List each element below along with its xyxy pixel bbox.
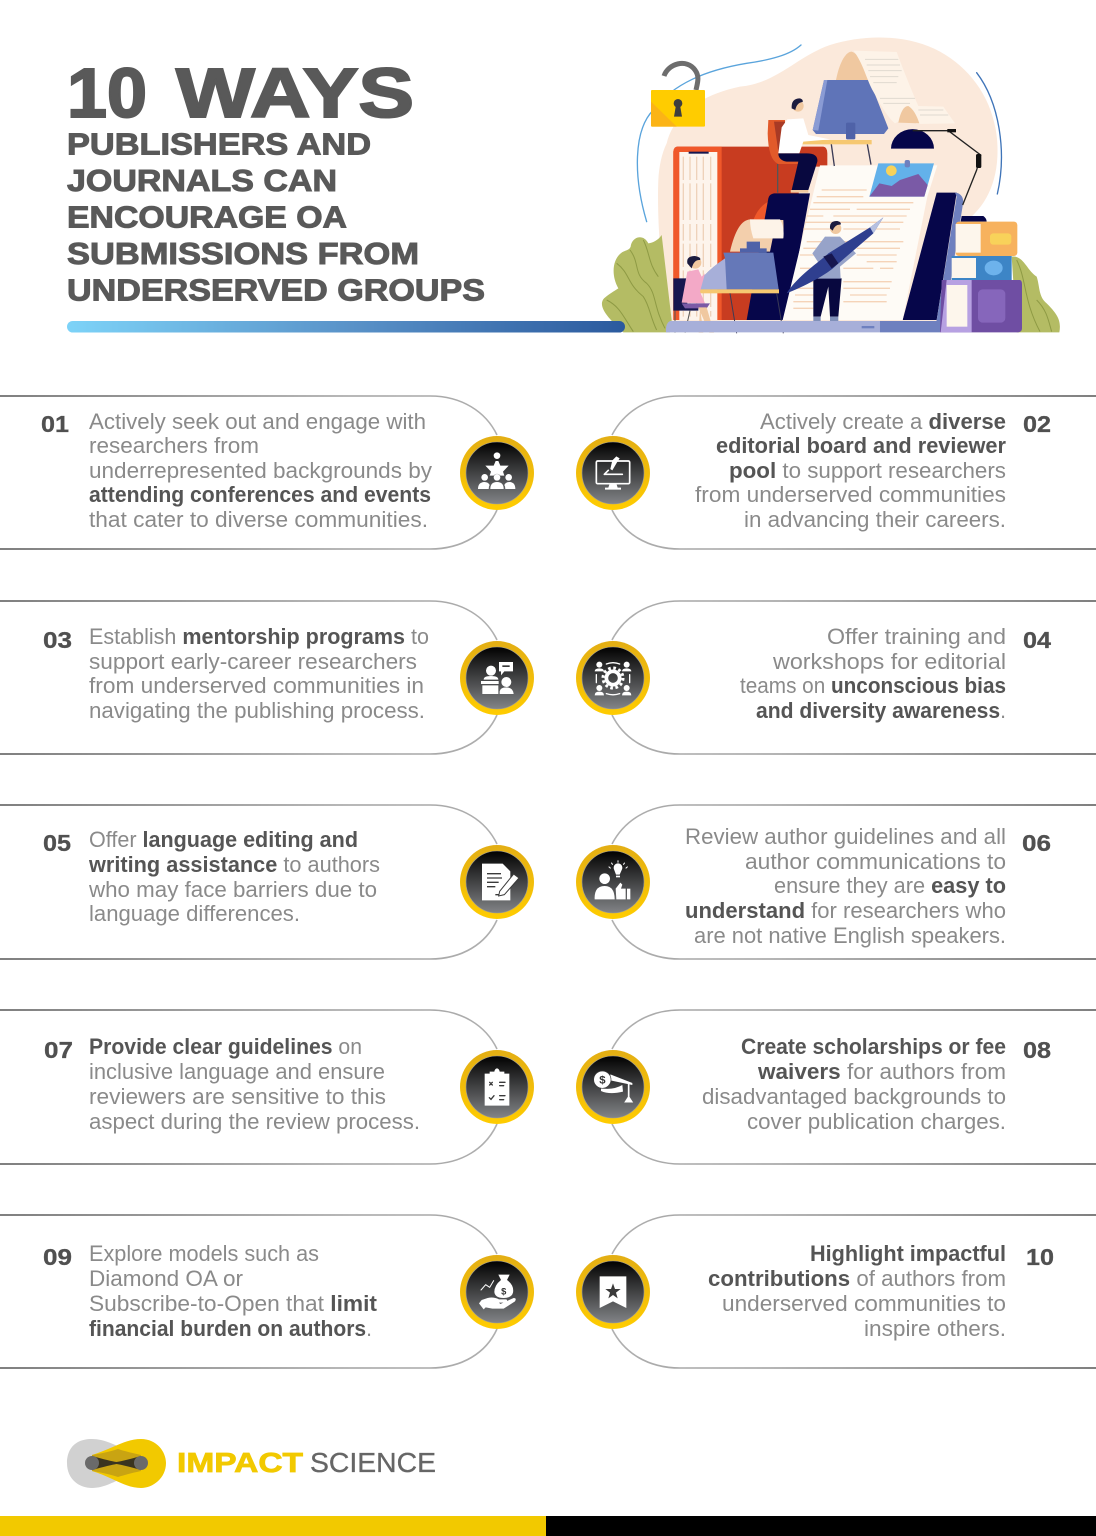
- subtitle: UNDERSERVED GROUPS: [67, 272, 485, 308]
- stacked books: [940, 216, 1022, 332]
- panel outline: [612, 1215, 1096, 1368]
- text block: aspect during the review process.: [89, 1109, 420, 1134]
- text block: from underserved communities: [695, 482, 1006, 507]
- number 08: 08: [1023, 1037, 1051, 1063]
- text block: Offer training and: [827, 624, 1006, 649]
- icon: document and pen: [460, 845, 534, 919]
- title: 10 ways: WAYS: [176, 54, 414, 132]
- number 10: 10: [1026, 1244, 1054, 1270]
- text block: workshops for editorial: [772, 649, 1006, 674]
- text block: that cater to diverse communities.: [89, 507, 428, 532]
- text block: inspire others.: [864, 1316, 1006, 1341]
- gradient header bar: [67, 321, 625, 332]
- panel outline: [612, 805, 1096, 959]
- text block: teams on unconscious bias: [740, 673, 1006, 698]
- text block: financial burden on authors.: [89, 1316, 372, 1341]
- panel: way 04: [576, 601, 1096, 754]
- text block: [89, 409, 432, 532]
- logo wordmark: SCIENCE: [310, 1447, 436, 1478]
- panel: way 01: [0, 396, 534, 549]
- text block: cover publication charges.: [747, 1109, 1006, 1134]
- text block: and diversity awareness.: [756, 698, 1006, 723]
- text block: underrepresented backgrounds by: [89, 458, 432, 483]
- logo wordmark: [177, 1447, 436, 1478]
- text block: [695, 409, 1006, 532]
- framed picture: [869, 160, 934, 197]
- subtitle: PUBLISHERS AND: [67, 126, 371, 162]
- panel outline: [612, 601, 1096, 754]
- text block: [702, 1034, 1006, 1134]
- footer bar: [0, 1516, 1096, 1536]
- text block: author communications to: [745, 849, 1006, 874]
- panel: way 02: [576, 396, 1096, 549]
- text block: understand for researchers who: [685, 898, 1006, 923]
- text block: Diamond OA or: [89, 1266, 243, 1291]
- decorative blue curves: [637, 45, 1001, 222]
- number 04: 04: [1023, 627, 1051, 653]
- text block: writing assistance to authors: [88, 852, 380, 877]
- panel outline: [0, 1215, 497, 1368]
- panel: way 08: [576, 1010, 1096, 1164]
- typewriter with sheet: [690, 219, 784, 333]
- panel: way 10: [576, 1215, 1096, 1368]
- icon: coin and graduation cap: [576, 1050, 650, 1124]
- text block: in advancing their careers.: [744, 507, 1006, 532]
- text block: disadvantaged backgrounds to: [702, 1084, 1006, 1109]
- text block: [708, 1241, 1006, 1341]
- seated person at monitor: [768, 98, 830, 193]
- seated girl at typewriter: [673, 256, 714, 333]
- icon: coin and graduation cap: $: [599, 1075, 606, 1087]
- large red book: [673, 147, 827, 320]
- panel: way 06: [576, 805, 1096, 959]
- number 07: 07: [44, 1037, 73, 1063]
- logo: Impact Science: [67, 1439, 436, 1488]
- subtitle: [67, 126, 485, 308]
- text block: support early-career researchers: [89, 649, 417, 674]
- text block: Subscribe-to-Open that limit: [89, 1291, 378, 1316]
- right bush: [1012, 257, 1060, 332]
- text block: Highlight impactful: [810, 1241, 1006, 1266]
- text block: Offer language editing and: [89, 827, 358, 852]
- title: 10 ways: [67, 54, 414, 132]
- navy book covers: [747, 193, 957, 320]
- number 01: 01: [41, 411, 69, 437]
- icon: money bag in hand: [460, 1255, 534, 1329]
- icon: bookmark with star: [576, 1255, 650, 1329]
- text block: [88, 827, 380, 926]
- text block: [89, 1241, 378, 1341]
- left bush: [602, 235, 672, 332]
- panel: way 03: [0, 601, 534, 754]
- laptop base: [666, 321, 942, 332]
- panel outline: [0, 1010, 497, 1164]
- subtitle: JOURNALS CAN: [67, 163, 337, 198]
- text block: Establish mentorship programs to: [89, 624, 429, 649]
- text block: waivers for authors from: [757, 1059, 1006, 1084]
- text block: reviewers are sensitive to this: [89, 1084, 386, 1109]
- logo wordmark: IMPACT: [177, 1447, 303, 1478]
- text block: Create scholarships or fee: [741, 1034, 1006, 1059]
- panel outline: [0, 601, 497, 754]
- illustration: people working on publications: [602, 37, 1060, 333]
- text block: navigating the publishing process.: [89, 698, 425, 723]
- panel outline: [0, 396, 497, 549]
- icon: mentor and mentee: [460, 641, 534, 715]
- icon: team around gear: [576, 641, 650, 715]
- number 02: 02: [1023, 411, 1051, 437]
- panel: way 09: [0, 1215, 534, 1368]
- panel outline: [612, 1010, 1096, 1164]
- monitor with paper scroll: [799, 51, 955, 166]
- panel outline: [0, 805, 497, 959]
- number 06: 06: [1022, 830, 1051, 856]
- text block: [685, 824, 1006, 948]
- text block: attending conferences and events: [89, 482, 431, 507]
- title: [67, 54, 485, 308]
- title: 10 ways: 10: [67, 54, 147, 132]
- desk lamp: [891, 129, 981, 205]
- text block: ensure they are easy to: [774, 873, 1006, 898]
- logo mark: [67, 1439, 166, 1488]
- white paper page: [783, 165, 937, 320]
- icon: money bag in hand: $: [501, 1287, 507, 1297]
- number 05: 05: [43, 830, 71, 856]
- text block: who may face barriers due to: [88, 877, 377, 902]
- text block: language differences.: [89, 901, 300, 926]
- text block: contributions of authors from: [708, 1266, 1006, 1291]
- icon: person with idea and thumbs up: [576, 845, 650, 919]
- text block: Review author guidelines and all: [685, 824, 1006, 849]
- panel outline: [612, 396, 1096, 549]
- icon: leader and group: [460, 436, 534, 510]
- panel: way 05: [0, 805, 534, 959]
- blue book spine: [933, 193, 963, 332]
- text block: researchers from: [89, 433, 259, 458]
- man holding fountain pen: [787, 217, 883, 321]
- subtitle: SUBMISSIONS FROM: [67, 236, 419, 271]
- text block: [89, 1034, 420, 1134]
- text block: editorial board and reviewer: [716, 433, 1006, 458]
- text block: [89, 624, 429, 723]
- number 03: 03: [43, 627, 72, 653]
- text block: inclusive language and ensure: [89, 1059, 385, 1084]
- text block: are not native English speakers.: [694, 923, 1006, 948]
- text block: pool to support researchers: [729, 458, 1006, 483]
- icon: monitor with pen: [576, 436, 650, 510]
- text block: Actively seek out and engage with: [89, 409, 426, 434]
- icon: clipboard checklist: [460, 1050, 534, 1124]
- text block: from underserved communities in: [89, 673, 424, 698]
- text block: underserved communities to: [722, 1291, 1006, 1316]
- text block: Actively create a diverse: [760, 409, 1006, 434]
- subtitle: ENCOURAGE OA: [67, 200, 347, 234]
- number 09: 09: [43, 1244, 72, 1270]
- text block: Provide clear guidelines on: [89, 1034, 362, 1059]
- panel: way 07: [0, 1010, 534, 1164]
- text block: [740, 624, 1006, 723]
- background blob: [658, 37, 998, 322]
- icon: open padlock: [651, 63, 705, 127]
- text block: Explore models such as: [89, 1241, 319, 1266]
